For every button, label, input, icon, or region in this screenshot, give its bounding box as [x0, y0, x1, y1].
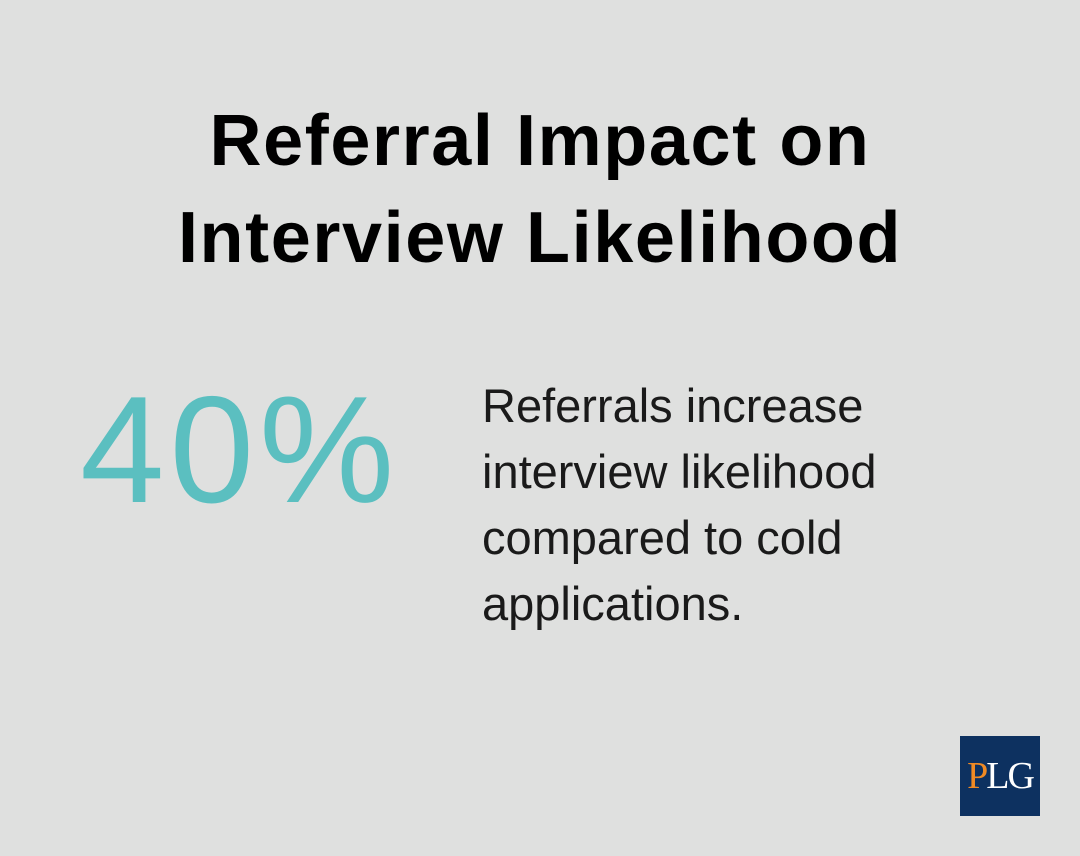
stat: 40%: 40% — [80, 365, 399, 535]
logo: PLG — [960, 736, 1040, 816]
description text: applications. — [482, 577, 743, 630]
description text: compared to cold — [482, 511, 843, 564]
description text: Referrals increase — [482, 379, 863, 432]
title: Referral Impact on — [210, 101, 870, 181]
logo: PLG: PLG — [967, 755, 1033, 797]
description text: interview likelihood — [482, 445, 876, 498]
title: Interview Likelihood — [178, 198, 902, 278]
description text — [482, 379, 876, 630]
title — [178, 101, 902, 278]
